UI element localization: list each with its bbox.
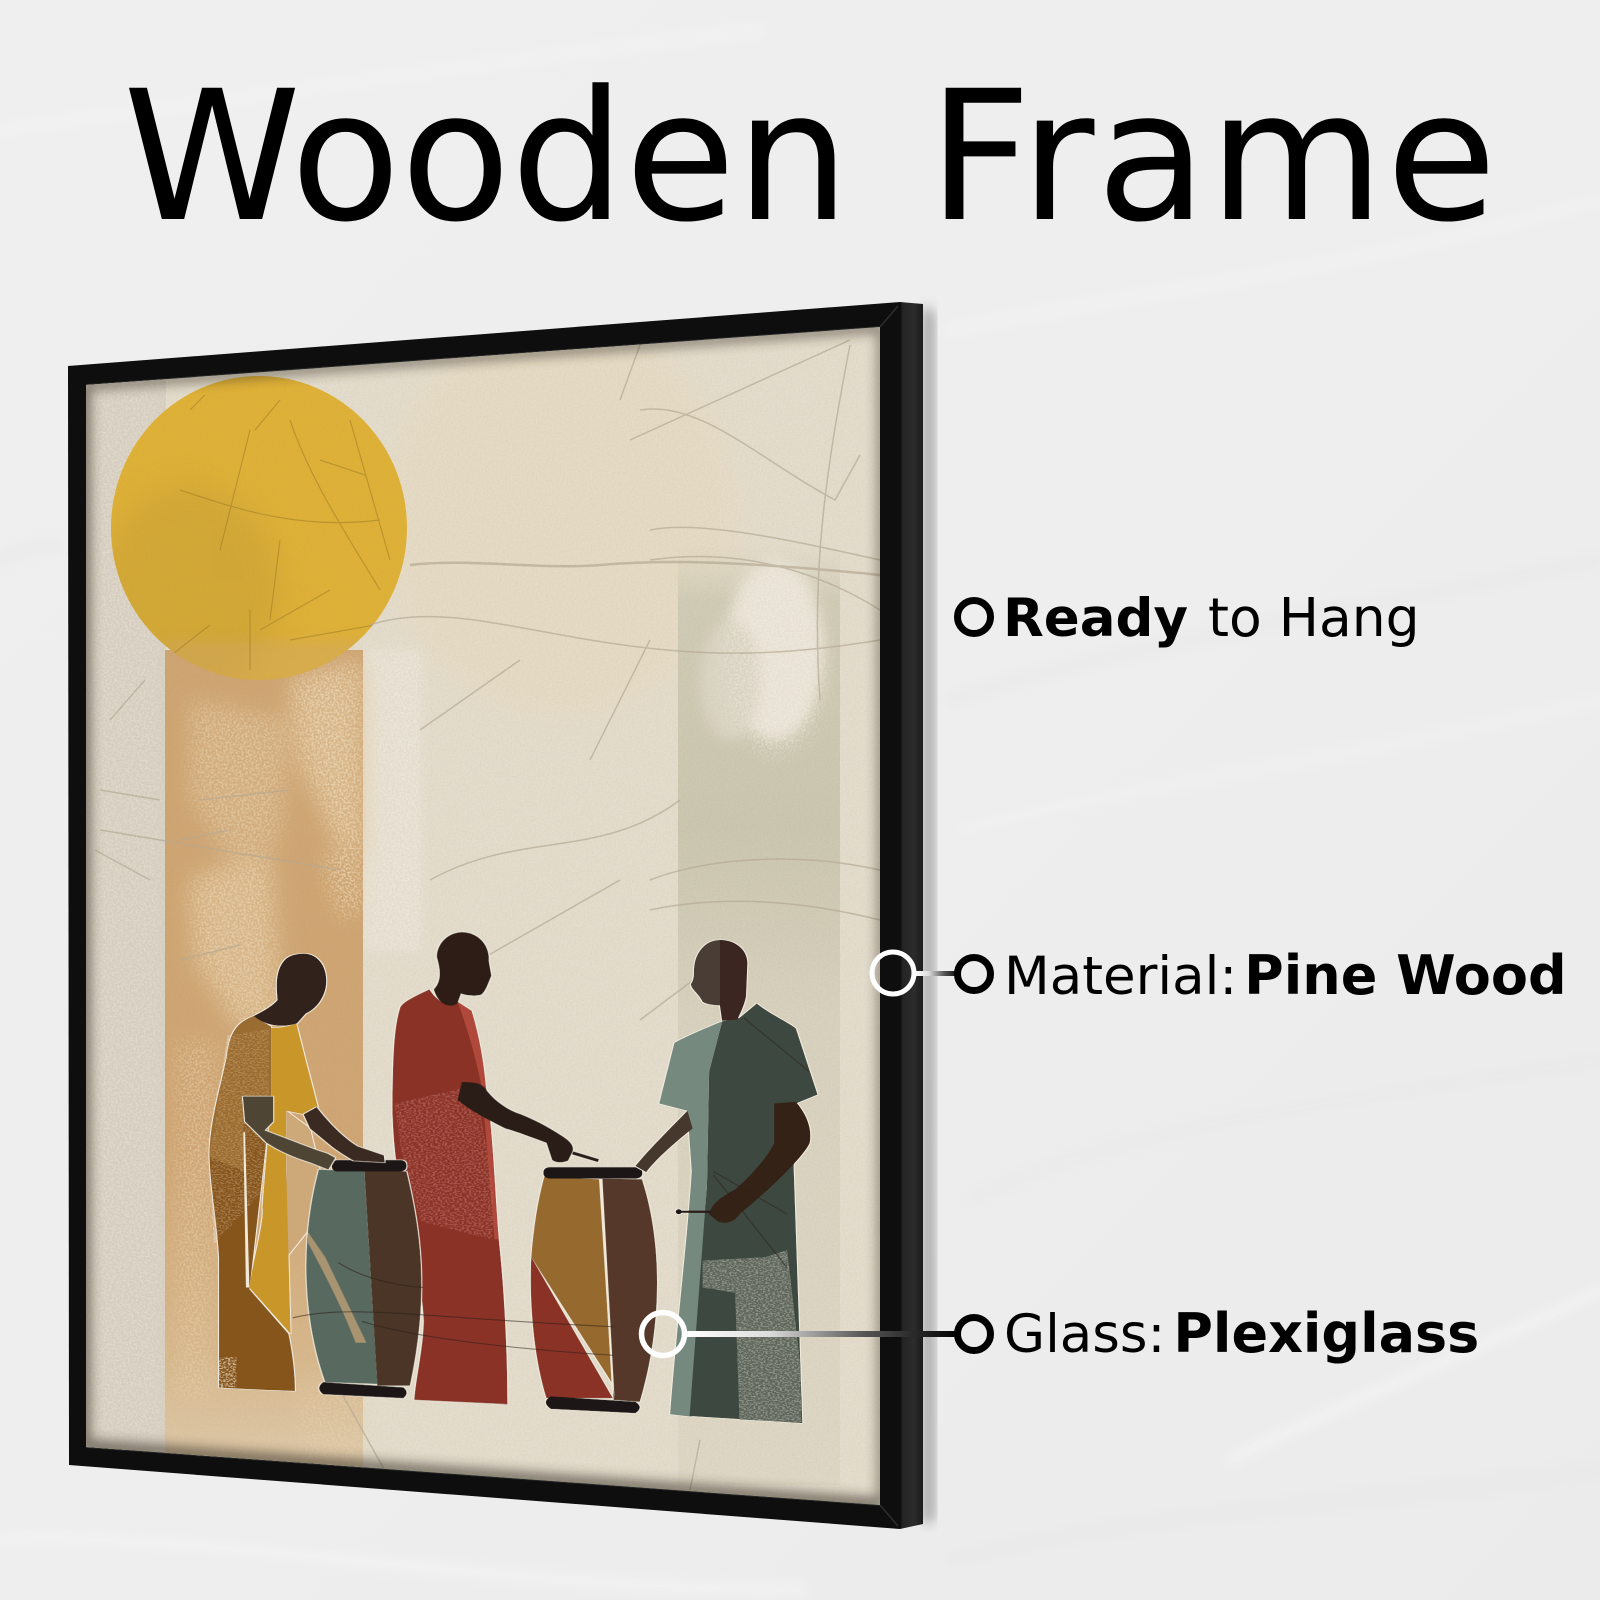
frame shadow on wall — [923, 306, 934, 1524]
framed poster — [68, 302, 934, 1529]
warm upper canvas wash — [437, 343, 659, 360]
black wooden frame — [68, 302, 923, 1529]
callout: glass — [642, 1302, 1479, 1365]
title — [123, 53, 1499, 262]
yellow sun — [100, 376, 407, 695]
left musician arms — [243, 1096, 385, 1170]
pale left band — [86, 340, 166, 1450]
callout: material: Material:Pine Wood — [1004, 944, 1567, 1007]
callout: ready to hang: Ready to Hang — [1003, 586, 1420, 649]
left drum — [306, 1160, 421, 1398]
title: Wooden — [123, 53, 850, 262]
paper grain — [80, 320, 890, 1510]
title: Frame — [928, 53, 1499, 262]
left musician — [209, 954, 326, 1391]
right musician — [635, 940, 818, 1423]
orange column — [165, 650, 363, 1480]
glass shadow along frame edges — [84, 327, 882, 1505]
canvas scratches — [95, 340, 880, 1490]
musicians and drums — [209, 932, 818, 1423]
middle musician — [393, 932, 599, 1404]
artwork canvas — [80, 320, 890, 1510]
right drum — [531, 1167, 657, 1413]
callout: glass: Glass:Plexiglass — [1004, 1302, 1479, 1365]
fine dark scratches over drums — [293, 1018, 809, 1355]
sage column — [678, 545, 840, 1485]
pale vertical streak — [364, 650, 424, 950]
